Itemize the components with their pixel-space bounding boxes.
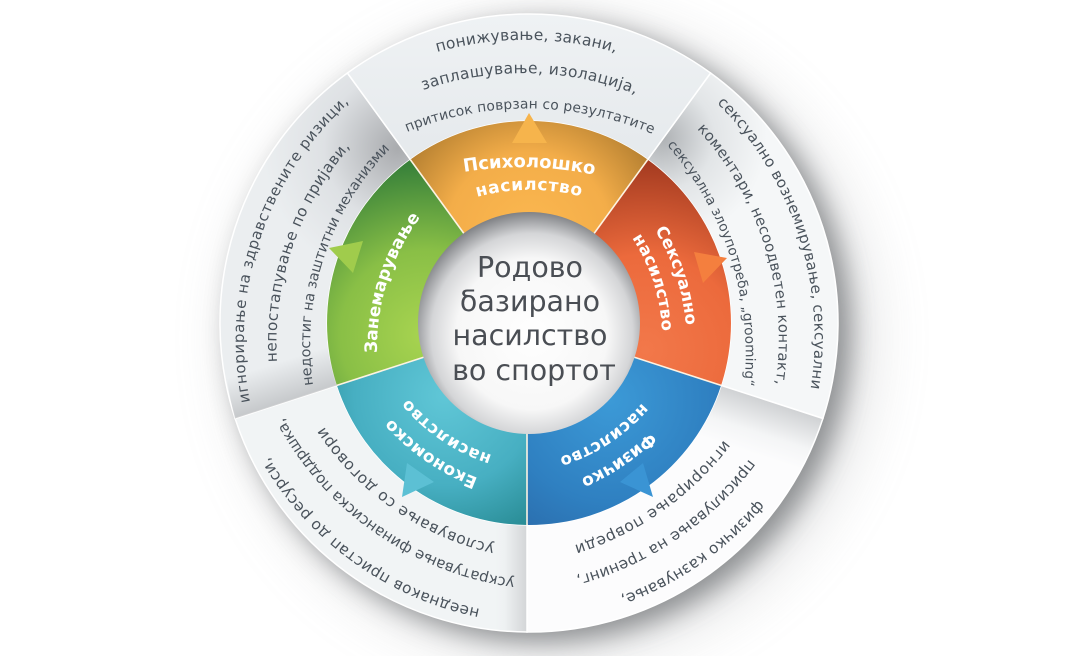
outer sector: psychological violence examples	[347, 14, 711, 160]
outer sector: physical violence examples	[527, 385, 823, 632]
text: physical violence examples: физичко казнување, присилување на тренинг, игнорирање повреди	[576, 441, 763, 602]
outer sector: economic violence examples	[235, 385, 527, 632]
label: Економско насилство: Економско насилство	[386, 401, 491, 489]
panel: Психолошко насилство	[348, 13, 711, 233]
text: psychological violence examples: понижување, закани, заплашување, изолација, притисок поврзан со резултатите	[406, 31, 654, 134]
icon: blue triangle pointer	[620, 463, 653, 497]
label: Занемарување: Занемарување	[364, 214, 419, 352]
title: Родово базирано насилство во спортот: базирано	[460, 285, 600, 318]
sector lower shading	[225, 345, 337, 418]
outer sector: neglect examples	[220, 73, 410, 418]
icon: green triangle pointer	[329, 241, 363, 273]
panel: Сексуално насилство	[595, 72, 839, 420]
icon: orange triangle pointer	[512, 113, 547, 143]
icon: teal triangle pointer	[402, 463, 434, 497]
icon: red triangle pointer	[694, 252, 727, 283]
outer sector: sexual violence examples	[648, 73, 838, 418]
segment separators	[337, 160, 721, 525]
label: Психолошко насилство: Психолошко насилство	[464, 157, 595, 196]
centre hub	[418, 212, 640, 434]
text: sexual violence examples: сексуално вознемирување, сексуалникоментари, несоодветен контакт,сексуална злоупотреба, „grooming“	[668, 99, 823, 388]
title: Родово базирано насилство во спортот: во спортот	[452, 354, 616, 387]
label: Сексуално насилство: Сексуалнонасилство	[632, 226, 695, 330]
panel: Занемарување	[219, 73, 463, 418]
coloured segment: blue	[527, 357, 721, 525]
panel: Физичко насилство	[526, 358, 824, 633]
coloured segment: green	[327, 160, 464, 385]
panel: Економско насилство	[234, 358, 528, 633]
coloured segment: red	[594, 160, 731, 385]
label: Физичко насилство: Физичко насилство	[561, 404, 656, 486]
coloured segment: orange	[410, 121, 648, 234]
title: Родово базирано насилство во спортот: Родово	[477, 251, 583, 284]
text: neglect examples: игнорирање на здравствените ризици, непостапување по пријави, недостиг на заштитни механизми	[236, 101, 389, 402]
title: Родово базирано насилство во спортот: насилство	[452, 319, 608, 352]
drop shadow behind wheel	[231, 20, 870, 656]
text: economic violence examples: нееднаков пристап до ресурси, ускратување финансиска поддршка, условување со договори	[265, 419, 514, 617]
coloured segment: teal	[337, 357, 527, 525]
